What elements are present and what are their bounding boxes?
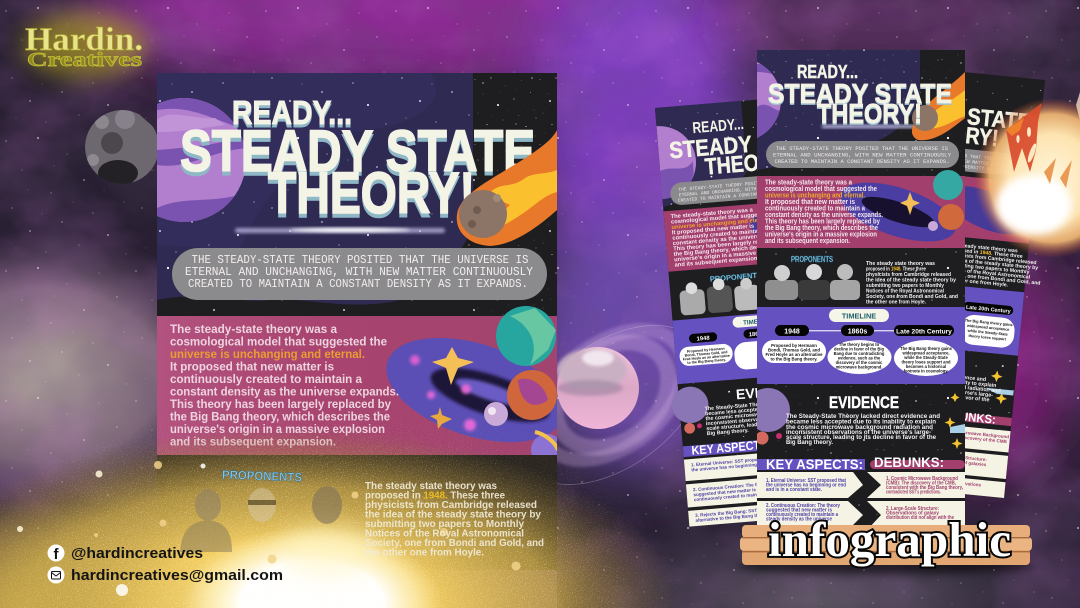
showcase: right tilted infographic page: to its inability to explain (936, 377, 997, 389)
centre page: timeline panel: Proposed by Hermann (771, 343, 817, 348)
centre page: timeline panel: Bang due to contradicting (834, 351, 885, 356)
centre page: key aspects and debunks: Observations of galaxy (886, 510, 939, 516)
centre page: title (768, 64, 952, 126)
main page: description text: constant density as the universe expands. (170, 384, 399, 398)
showcase: left tilted infographic page: 1. Eternal Universe: SST proposed that (691, 456, 776, 467)
showcase: right tilted infographic page: The Big Bang theory gains (965, 318, 1013, 327)
showcase: left tilted infographic page: the Big Bang theory, which describes the (673, 243, 788, 258)
centre page: evidence panel: became less accepted due to its inability to explain (786, 420, 936, 426)
centre page: timeline panel: microwave background. (836, 364, 882, 370)
centre page: title: THEORY! (817, 98, 922, 129)
centre page: pink description panel: This theory has been largely replaced by (765, 218, 880, 226)
main page: description text: It proposed that new matter is (170, 360, 334, 374)
showcase: right tilted infographic page: widespread acceptance (966, 324, 1010, 332)
main page: intro pill: CREATED TO MAINTAIN A CONSTANT DENSITY AS IT EXPANDS. (188, 278, 528, 291)
showcase: right tilted infographic page: 1. Cosmic Microwave Background (935, 427, 1010, 439)
showcase: left tilted infographic page: PROPONENTS (710, 270, 762, 284)
showcase: left tilted infographic page: It proposed that new matter is (672, 224, 754, 236)
main page: description text: This theory has been largely replaced by (170, 397, 391, 411)
showcase: left tilted infographic page: The Steady-State Theory lacked direct evidence (705, 397, 825, 412)
showcase: right tilted infographic page: background radiation and (936, 382, 1001, 395)
centre page: key aspects and debunks: 2. Large-Scale Structure: (886, 506, 939, 512)
showcase: right tilted infographic page: proposed in 1948. These three (949, 247, 1023, 260)
showcase: right tilted infographic page: the other one from Hoyle. (946, 276, 1009, 289)
icon: facebook: f (54, 546, 60, 563)
showcase: left tilted infographic page: Fred Hoyle as an alternative (683, 354, 730, 362)
centre page: intro pill (766, 141, 959, 168)
main page: proponents text: the other one from Hoyle. (365, 548, 484, 558)
centre page: key aspects and debunks: the universe has no beginning or end (766, 482, 846, 488)
showcase: right tilted infographic page: physicists from Cambridge released (948, 252, 1037, 266)
showcase: left tilted infographic page: THE STEADY-STATE THEORY POSITED THAT THE UNIVERSE IS (678, 175, 823, 193)
centre page: key aspects and debunks: (CMB): The discovery of the CMB, (886, 480, 956, 486)
centre page: key aspects and debunks: and is in a constant state. (766, 487, 822, 493)
showcase: left tilted infographic page: STEADY STATE (668, 125, 822, 163)
centre page: pink description panel: universe's origin in a massive explosion (765, 232, 877, 238)
main page: proponents text: Notices of the Royal Astronomical (365, 528, 524, 540)
showcase: right tilted infographic page (832, 63, 1060, 499)
main page: proponents panel background (157, 455, 557, 608)
centre page: key aspects and debunks: contradicted SST's predictions. (886, 490, 941, 496)
main page: pink description panel (157, 306, 557, 455)
centre page: pink description panel: It proposed that new matter is (765, 199, 855, 206)
showcase: left tilted infographic page: KEY ASPECTS: (691, 437, 771, 458)
icon: facebook (48, 544, 64, 563)
showcase: left tilted infographic page: suggested that new matter is (693, 487, 757, 497)
centre page: pink description panel: the Big Bang theory, which describes the (765, 225, 878, 232)
showcase: left tilted infographic page: This theory has been largely replaced by (673, 237, 786, 253)
centre page: intro pill: THE STEADY-STATE THEORY POSITED THAT THE UNIVERSE IS (776, 145, 948, 152)
centre page: timeline panel: widespread acceptance, (901, 350, 950, 356)
main page: proponents text: submitting two papers to Monthly (365, 519, 524, 530)
centre page: pink description panel: cosmological model that suggested the (765, 186, 877, 193)
main page: proponents text: The steady state theory was (365, 481, 497, 492)
centre page: proponents panel: submitting two papers to Monthly (866, 283, 945, 289)
social contact: facebook handle: @hardincreatives (71, 545, 203, 562)
proponents heading and portraits over the gold dust (180, 468, 342, 552)
showcase: left tilted infographic page: 3. Rejects the Big Bang: SST was an (695, 506, 774, 518)
main page: title: STEADY STATE (180, 123, 535, 188)
centre page: key aspects and debunks: DEBUNKS: (874, 454, 944, 470)
centre page: timeline panel: discovery of the cosmic (836, 360, 883, 365)
centre page: key aspects and debunks: suggested that new matter is (766, 508, 832, 514)
centre page: timeline panel: footnote in cosmology. (904, 368, 948, 374)
main page: proponents text: proposed in 1948. These three (365, 490, 505, 502)
showcase: right tilted infographic page: CREATED TO MAINTAIN A CONSTANT DENSITY AS IT EXPANDS. (879, 156, 1026, 176)
showcase: right tilted infographic page: Late 20th Century (966, 305, 1011, 315)
portrait: Hoyle (312, 486, 342, 524)
main page: title: THEORY! (268, 161, 475, 226)
showcase: left tilted infographic page: EVIDENCE (735, 381, 809, 402)
centre page: timeline panel: 1948 (784, 328, 800, 336)
centre page: title: STEADY STATE (768, 78, 952, 109)
centre page: key aspects and debunks: continuously created to maintain a (766, 512, 838, 518)
centre page: key aspects and debunks: KEY ASPECTS: (766, 456, 863, 472)
showcase: right tilted infographic page: the idea of the steady state theory by (948, 257, 1038, 271)
showcase: right tilted infographic page: of the universe's large- (935, 387, 993, 399)
centre page: proponents panel: Society, one from Bondi and Gold, and (866, 294, 958, 300)
main page: description text: and its subsequent expansion. (170, 434, 336, 448)
showcase: right tilted infographic page: Notices of the Royal Astronomical (947, 267, 1031, 281)
centre page: pink description panel (757, 170, 965, 253)
main page: title: STEADY STATE (180, 119, 535, 184)
showcase: right tilted infographic page: THE STEADY-STATE THEORY POSITED THAT THE UNIVERSE IS (881, 145, 1026, 165)
main page: meteor icon (457, 130, 557, 246)
centre page: intro pill: CREATED TO MAINTAIN A CONSTANT DENSITY AS IT EXPANDS. (774, 158, 950, 165)
centre page: proponents panel: physicists from Cambridge released (866, 272, 951, 278)
showcase: left tilted infographic page: scale structure, leading to its decline (706, 419, 799, 432)
centre page: key aspects and debunks: distribution did not align with the (886, 515, 954, 521)
fire explosion at right edge (974, 92, 1080, 258)
centre page: evidence panel (757, 384, 965, 524)
centre page: pink description panel: universe is unchanging and eternal. (765, 192, 865, 200)
centre page: timeline panel: The Big Bang theory gains (900, 346, 953, 351)
main page: galaxy illustration (386, 306, 557, 455)
centre page: proponents panel: PROPONENTS (791, 254, 833, 264)
main page: proponents text: Society, one from Bondi and Gold, and (365, 538, 544, 549)
showcase: right tilted infographic page: (CMB): The discovery of the CMB (935, 432, 1008, 444)
showcase: right tilted infographic page: STEADY STATE (878, 95, 1032, 135)
showcase: left tilted infographic page: the cosmic microwave background radiation (705, 407, 818, 422)
banner word: infographic: infographic (768, 512, 1011, 567)
proponents heading: PROPONENTS (222, 468, 302, 484)
showcase: left tilted infographic page: THEORY! (704, 147, 793, 180)
main page: intro pill: THE STEADY-STATE THEORY POSITED THAT THE UNIVERSE IS (192, 254, 529, 267)
centre page: evidence panel: inconsistent observations of the universe's large- (786, 430, 931, 436)
wooden infographic banner (735, 512, 1035, 574)
centre page: key aspects and debunks: 2. Continuous Creation: The theory (766, 503, 840, 509)
centre page: timeline panel: Late 20th Century (896, 328, 952, 336)
showcase: left tilted infographic page: alternative to the Big Bang theory (695, 512, 769, 523)
showcase: right tilted infographic page: 3. Lack of observations (930, 478, 982, 488)
gold stardust glow over lower left (0, 390, 700, 608)
asteroid behind main page (85, 110, 157, 184)
showcase: left tilted infographic page: 1860s (749, 331, 765, 338)
portrait: Gold (248, 488, 276, 522)
main infographic page (157, 73, 557, 608)
main page: header background (157, 73, 557, 316)
showcase: right tilted infographic page: Observations of galaxies (932, 457, 987, 467)
showcase: left tilted infographic page (648, 94, 863, 527)
centre page: timeline panel: while the Steady-State (903, 355, 948, 360)
portrait: Bondi (180, 489, 232, 552)
centre page: pink description panel: continuously created to maintain a (765, 206, 865, 212)
main page: proponents text: the idea of the steady state theory by (365, 510, 541, 520)
centre page: timeline panel: theory loses support and (902, 360, 951, 364)
showcase: left tilted infographic page: continuously created to maintain a (694, 491, 769, 502)
centre page: key aspects and debunks: consistent with the Big Bang theory, (886, 485, 963, 491)
showcase: left tilted infographic page: ETERNAL AND UNCHANGING, WITH NEW MATTER CONTINUOUSLY (679, 181, 823, 198)
showcase: left tilted infographic page: universe is unchanging and eternal. (671, 217, 771, 231)
centre page: timeline panel: decline in favor of the Big (834, 346, 885, 352)
centre page: title: THEORY! (817, 100, 922, 130)
showcase: left tilted infographic page: READY... (692, 116, 744, 137)
centre page: key aspects and debunks: 1. Cosmic Microwave Background (886, 476, 958, 482)
centre page: evidence panel: Big Bang theory. (786, 440, 833, 446)
showcase: right tilted infographic page: decline in favor of the (935, 392, 990, 403)
centre page: key aspects and debunks (757, 458, 965, 525)
centre page: evidence panel: the cosmic microwave background radiation and (786, 425, 933, 431)
centre page: pink description panel: and its subsequent expansion. (765, 238, 850, 245)
showcase: left tilted infographic page: inconsistent observations of the universe's (706, 412, 815, 427)
showcase: left tilted infographic page: Proposed by Hermann (687, 347, 725, 354)
planet with rings (491, 293, 733, 517)
centre page: timeline panel (757, 307, 965, 384)
showcase: left tilted infographic page: 1948 (696, 336, 711, 343)
centre page: evidence panel: scale structure, leading to its decline in favor of the (786, 435, 937, 441)
showcase: left tilted infographic page: CREATED TO MAINTAIN A CONSTANT DENSITY AS IT EXPANDS. (678, 186, 825, 204)
main page: title (180, 100, 533, 218)
showcase: left tilted infographic page: universe's origin in a massive explosion (674, 248, 785, 263)
showcase: left tilted infographic page: became less accepted due to its inability to (705, 402, 815, 417)
centre page: timeline panel: TIMELINE (842, 312, 876, 320)
centre page: header area (757, 50, 965, 176)
brand logo: Hardin Creatives: Hardin. (25, 22, 143, 58)
main page: description text: continuously created to maintain a (170, 372, 362, 386)
centre page: timeline panel: evidence, such as the (838, 356, 881, 360)
centre page: key aspects and debunks: steady density as the universe (766, 516, 832, 522)
centre page: timeline panel: to the Big Bang theory. (771, 356, 817, 362)
showcase: left tilted infographic page: The steady-state theory was a (670, 207, 754, 220)
centre page: proponents panel: Notices of the Royal Astronomical (866, 288, 944, 294)
centre page: timeline panel: becomes a historical (906, 364, 946, 369)
icon: mail (48, 566, 64, 584)
showcase: right tilted infographic page: THEORY! (910, 117, 1000, 151)
brand logo: Hardin Creatives (23, 13, 147, 77)
centre page: timeline panel: The theory begins to (839, 342, 880, 347)
showcase: right tilted infographic page: direct evidence and (937, 372, 986, 383)
showcase: right tilted infographic page: 2. Large-Scale Structure: (933, 452, 988, 462)
main page: title: READY... (232, 97, 352, 134)
main page: proponents text: physicists from Cambridge released (365, 500, 537, 511)
social contact: email address: hardincreatives@gmail.com (71, 567, 283, 584)
main page: description text (170, 322, 399, 448)
showcase: left tilted infographic page: and its subsequent expansion. (674, 256, 760, 269)
main page: description text: The steady-state theory was a (170, 322, 337, 336)
centre page: title: READY... (797, 62, 858, 82)
centre page: timeline panel: Bondi, Thomas Gold, and (768, 348, 820, 352)
main page: title: READY... (232, 94, 352, 131)
centre page: proponents panel: The steady state theory was (866, 261, 935, 267)
showcase: right tilted infographic page: theory loses support (968, 334, 1007, 342)
brand logo: Hardin Creatives: Creatives (27, 49, 142, 71)
showcase: right tilted infographic page: DEBUNKS: (936, 407, 997, 427)
showcase: left tilted infographic page: cosmological model that suggested the (671, 211, 781, 226)
main page: description text: cosmological model that suggested the (170, 334, 387, 348)
centre page: evidence panel: The Steady-State Theory lacked direct evidence and (786, 414, 940, 420)
main page: intro pill: ETERNAL AND UNCHANGING, WITH NEW MATTER CONTINUOUSLY (185, 266, 533, 279)
main page: purple planet (157, 98, 244, 222)
showcase: right tilted infographic page: The steady state theory was (949, 242, 1018, 254)
centre page: timeline panel: Fred Hoyle as an alternative (765, 352, 823, 357)
main page: title: THEORY! (268, 165, 475, 230)
main page: description text: universe's origin in a massive explosion (170, 422, 385, 436)
centre page: proponents panel: the idea of the steady state theory by (866, 278, 957, 284)
main page: intro pill (172, 248, 547, 300)
showcase: right tilted infographic page: Society, one from Bondi and Gold, and (946, 272, 1041, 287)
centre page: pink description panel: The steady-state theory was a (765, 180, 852, 186)
centre page: pink description panel: constant density as the universe expands. (765, 212, 883, 219)
main page: proponents text (365, 481, 544, 558)
showcase: right tilted infographic page: ETERNAL AND UNCHANGING, WITH NEW MATTER CONTINUOUSLY (881, 150, 1025, 170)
centre page: timeline panel: 1860s (848, 328, 867, 336)
showcase: centre infographic page (757, 50, 965, 525)
centre page: proponents panel: proposed in 1948. These three (866, 266, 927, 272)
showcase: left tilted infographic page: continuously created to maintain a (672, 228, 769, 242)
showcase: left tilted infographic page: the universe has no beginning or end (691, 461, 772, 472)
showcase: right tilted infographic page: submitting two papers to Monthly (947, 262, 1030, 276)
centre page: key aspects and debunks: 1. Eternal Universe: SST proposed that (766, 478, 846, 484)
showcase: right tilted infographic page: while the Steady-State (966, 329, 1008, 337)
showcase: left tilted infographic page: 2. Continuous Creation: The theory (693, 481, 770, 492)
centre page: intro pill: ETERNAL AND UNCHANGING, WITH NEW MATTER CONTINUOUSLY (773, 152, 951, 158)
showcase: left tilted infographic page: to the Big Bang theory. (687, 358, 726, 365)
centre page: proponents panel (757, 248, 965, 307)
showcase: left tilted infographic page: TIMELINE (743, 317, 772, 327)
showcase: left tilted infographic page: Big Bang theory. (707, 428, 749, 437)
showcase: left tilted infographic page: Bondi, Thomas Gold, and (684, 350, 728, 358)
showcase: left tilted infographic page: constant density as the universe expands. (673, 232, 790, 247)
centre page: proponents panel: the other one from Hoyle. (866, 300, 926, 306)
centre page: evidence panel: EVIDENCE (829, 393, 899, 412)
centre page: title: STEADY STATE (768, 80, 952, 110)
main page: description text: universe is unchanging and eternal. (170, 347, 365, 361)
main page: description text: the Big Bang theory, which describes the (170, 410, 390, 424)
